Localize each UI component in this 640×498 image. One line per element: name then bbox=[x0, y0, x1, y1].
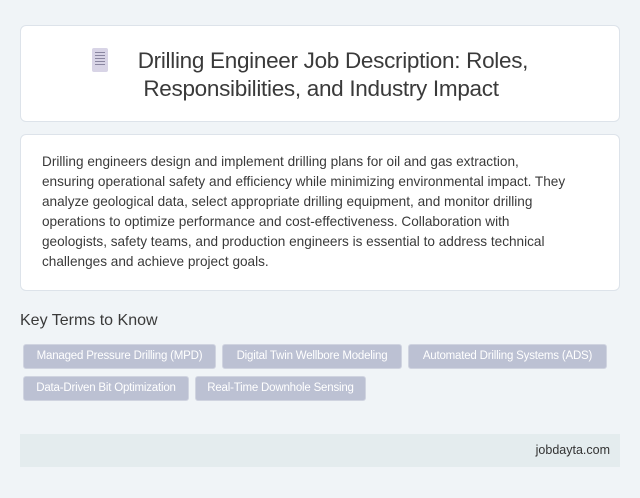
title bbox=[138, 48, 528, 101]
icon: document bbox=[92, 48, 108, 72]
tag 1: Managed Pressure Drilling (MPD) bbox=[37, 350, 202, 362]
description paragraph: challenges and achieve project goals. bbox=[42, 254, 269, 269]
heading: key terms: Key Terms to Know bbox=[20, 312, 158, 329]
tag 4: Data-Driven Bit Optimization bbox=[36, 382, 176, 394]
header card bbox=[20, 25, 620, 122]
description paragraph: operations to optimize performance and cost-effectiveness. Collaboration with bbox=[42, 214, 509, 229]
tag 2 bbox=[222, 344, 402, 369]
description paragraph: Drilling engineers design and implement drilling plans for oil and gas extraction, bbox=[42, 154, 519, 169]
tag 5: Real-Time Downhole Sensing bbox=[207, 382, 354, 394]
description paragraph: analyze geological data, select appropriate drilling equipment, and monitor drilling bbox=[42, 194, 532, 209]
tag 1 bbox=[23, 344, 216, 369]
tag 3: Automated Drilling Systems (ADS) bbox=[423, 350, 592, 362]
tag 5 bbox=[195, 376, 366, 401]
title: Drilling Engineer Job Description: Roles, bbox=[138, 48, 528, 73]
tag 4 bbox=[23, 376, 189, 401]
description paragraph: ensuring operational safety and efficiency while minimizing environmental impact. They bbox=[42, 174, 565, 189]
description card bbox=[20, 134, 620, 291]
description paragraph: geologists, safety teams, and production engineers is essential to address technical bbox=[42, 234, 545, 249]
title: Responsibilities, and Industry Impact bbox=[143, 76, 499, 101]
footer bbox=[20, 434, 620, 467]
tag 2: Digital Twin Wellbore Modeling bbox=[237, 350, 387, 362]
description paragraph bbox=[42, 154, 566, 269]
footer text: jobdayta.com bbox=[536, 443, 610, 457]
tag 3 bbox=[408, 344, 607, 369]
